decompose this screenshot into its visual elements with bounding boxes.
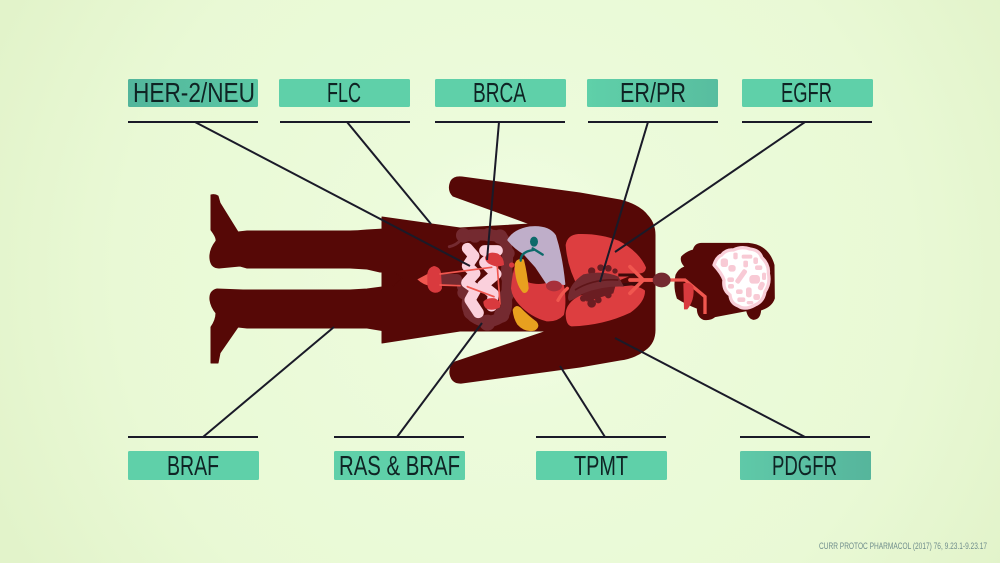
head silhouette xyxy=(675,243,774,320)
abdominal organs xyxy=(417,227,564,331)
pancreas xyxy=(513,307,538,330)
colon xyxy=(443,228,515,331)
label: RAS & BRAF: RAS & BRAF xyxy=(339,450,460,481)
head xyxy=(640,243,774,320)
bronchus xyxy=(568,273,624,301)
label: ER/PR xyxy=(587,77,718,123)
human body silhouette xyxy=(210,177,655,383)
airway dark bands xyxy=(618,275,637,285)
label: EGFR xyxy=(742,77,873,123)
bile duct xyxy=(521,237,543,261)
upper lung xyxy=(567,235,645,288)
lungs and airways xyxy=(558,235,653,325)
label: PDGFR xyxy=(740,436,871,481)
bladder xyxy=(417,266,442,293)
label: TPMT xyxy=(536,436,667,481)
liver xyxy=(508,227,564,284)
legs xyxy=(210,195,460,363)
label: RAS & BRAF xyxy=(334,436,465,481)
blood vessels xyxy=(440,267,500,304)
label: PDGFR: PDGFR xyxy=(772,450,837,481)
lower lung xyxy=(567,285,644,325)
gallbladder xyxy=(515,260,528,292)
label: TPMT: TPMT xyxy=(574,450,628,481)
brain xyxy=(714,248,769,308)
stomach xyxy=(512,262,564,320)
kidney blobs xyxy=(483,253,514,310)
leader lines xyxy=(195,122,805,437)
spleen xyxy=(546,281,562,291)
esophagus xyxy=(558,288,567,300)
label: HER-2/NEU xyxy=(128,77,258,123)
label: EGFR: EGFR xyxy=(781,77,832,108)
label: BRCA xyxy=(435,77,566,123)
label: FLC: FLC xyxy=(327,77,361,108)
trachea and branches xyxy=(630,267,653,293)
torso and arms xyxy=(382,177,655,383)
label: HER-2/NEU: HER-2/NEU xyxy=(133,77,255,108)
intestines xyxy=(467,248,497,313)
neck node xyxy=(653,273,671,287)
tongue xyxy=(683,283,694,309)
label: BRAF: BRAF xyxy=(167,450,219,481)
label: BRCA: BRCA xyxy=(473,77,526,108)
throat vessels xyxy=(640,280,705,314)
label: BRAF xyxy=(128,436,259,481)
bronchial lobes xyxy=(580,264,618,308)
label: FLC xyxy=(279,77,410,123)
label: ER/PR: ER/PR xyxy=(620,77,686,108)
